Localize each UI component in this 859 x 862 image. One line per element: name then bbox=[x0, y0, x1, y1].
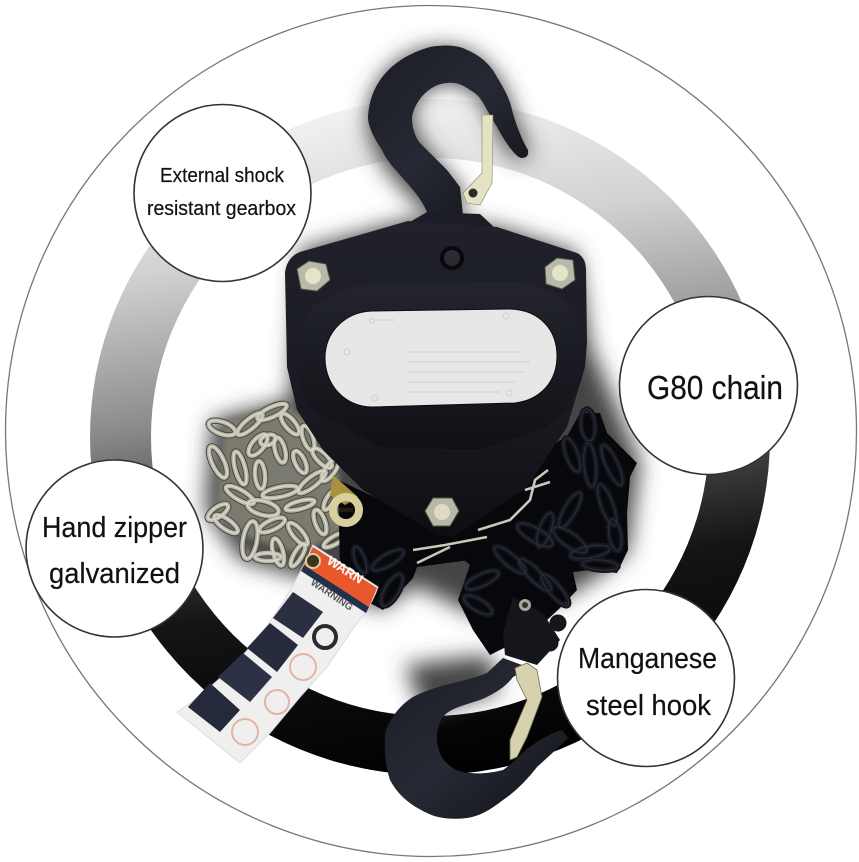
brass ring bbox=[330, 475, 359, 523]
callout: manganese steel hook: Manganese bbox=[578, 643, 717, 675]
safety latch bbox=[463, 115, 493, 205]
bolt bottom bbox=[425, 498, 459, 526]
raised bezel bbox=[297, 282, 585, 450]
callout: hand zipper galvanized: galvanized bbox=[49, 558, 180, 590]
callout: hand zipper galvanized: Hand zipper bbox=[42, 512, 187, 544]
bottom hook bbox=[385, 658, 568, 819]
callout: G80 chain bbox=[620, 296, 798, 474]
soft shadow around hoist bbox=[205, 47, 640, 715]
warning tag: WARNING bbox=[308, 577, 355, 614]
top hook bbox=[368, 46, 528, 215]
bolt upper right bbox=[545, 258, 575, 289]
bottom latch bbox=[510, 663, 542, 760]
bolt upper left bbox=[297, 261, 330, 291]
warning tag: WARN bbox=[324, 553, 366, 587]
callout: G80 chain: G80 chain bbox=[647, 369, 783, 406]
callout: manganese steel hook: steel hook bbox=[586, 690, 711, 722]
gradient ring bbox=[90, 99, 770, 775]
silver hand chain bbox=[205, 401, 348, 568]
callout: external shock resistant gearbox: resistant gearbox bbox=[147, 198, 296, 220]
nameplate bbox=[325, 309, 557, 407]
callout: external shock resistant gearbox bbox=[134, 104, 311, 282]
hoist body bbox=[285, 212, 587, 537]
bottom swivel block bbox=[503, 597, 566, 665]
warning tag bbox=[177, 545, 378, 763]
callout: hand zipper galvanized bbox=[26, 460, 203, 637]
callout: external shock resistant gearbox: External shock bbox=[160, 165, 285, 187]
callout: manganese steel hook bbox=[558, 590, 734, 766]
black load chain bbox=[338, 408, 637, 655]
top pin bbox=[440, 246, 464, 270]
